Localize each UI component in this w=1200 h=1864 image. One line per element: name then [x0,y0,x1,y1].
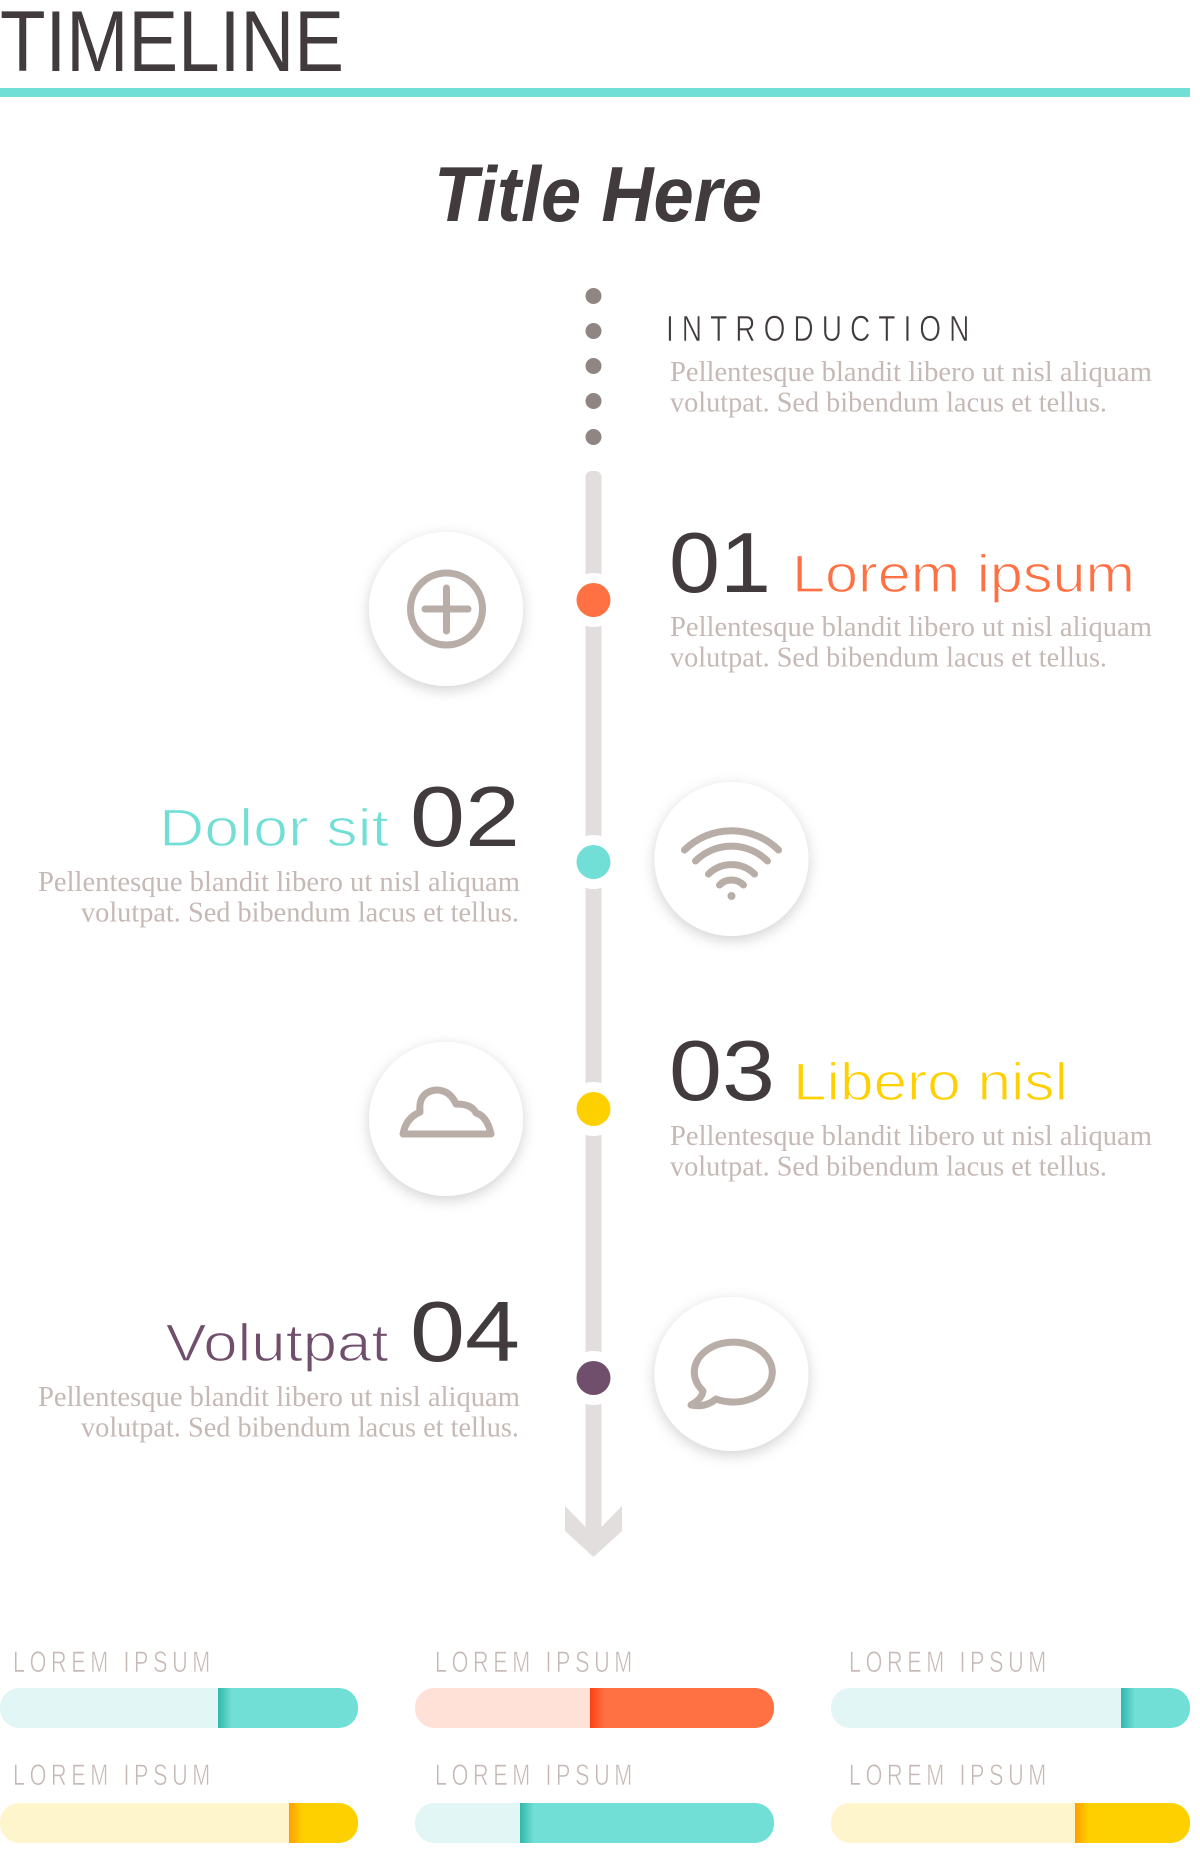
step 04 [38,1285,520,1444]
step 01: Pellentesque blandit libero ut nisl aliquam [670,612,1152,643]
timeline node 2 [566,835,620,889]
introduction text block: INTRODUCTION [666,309,969,349]
progress bar 6: LOREM IPSUM [849,1757,1046,1792]
progress bar 2 [415,1644,774,1728]
icon: wifi [654,782,808,936]
progress bar 4 [0,1757,358,1843]
timeline arrow [565,471,622,1557]
timeline node 3 [566,1082,620,1136]
progress bar 2: LOREM IPSUM [435,1644,632,1679]
step 04: Volutpat [166,1314,389,1373]
progress bar 5: LOREM IPSUM [435,1757,632,1792]
step 01: Lorem ipsum [792,545,1135,604]
step 03: Libero nisl [793,1053,1068,1112]
introduction text block: Pellentesque blandit libero ut nisl aliquam [670,357,1152,388]
icon: plus [369,532,523,686]
step 01 [669,516,1152,674]
progress bar 3 [831,1644,1190,1728]
intro dots [586,288,602,445]
timeline node 1 [566,573,620,627]
step 02: Pellentesque blandit libero ut nisl aliquam [38,867,520,898]
timeline node 4 [566,1351,620,1405]
progress bar 5 [415,1757,774,1843]
progress bar 1 [0,1644,358,1728]
main title: Title Here [434,150,762,238]
step 04: 04 [410,1285,520,1380]
step 02 [38,770,520,928]
progress bar 6 [831,1757,1190,1843]
step 02: volutpat. Sed bibendum lacus et tellus. [81,898,519,928]
introduction text block: volutpat. Sed bibendum lacus et tellus. [670,388,1107,418]
step 04: volutpat. Sed bibendum lacus et tellus. [81,1412,519,1444]
progress bar 4: LOREM IPSUM [13,1757,210,1792]
step 03: 03 [669,1024,775,1119]
icon: speech bubble [654,1297,808,1451]
step 03: Pellentesque blandit libero ut nisl aliquam [670,1121,1152,1152]
step 03 [669,1024,1152,1182]
step 01: 01 [669,516,771,611]
step 02: 02 [410,770,520,865]
introduction text block [666,309,1152,418]
header rule [0,88,1190,97]
step 03: volutpat. Sed bibendum lacus et tellus. [670,1152,1107,1182]
progress bar 3: LOREM IPSUM [849,1644,1046,1679]
progress bar 1: LOREM IPSUM [13,1644,210,1679]
icon: cloud [369,1042,523,1196]
step 02: Dolor sit [159,799,389,858]
step 04: Pellentesque blandit libero ut nisl aliquam [38,1382,520,1413]
step 01: volutpat. Sed bibendum lacus et tellus. [670,642,1107,674]
